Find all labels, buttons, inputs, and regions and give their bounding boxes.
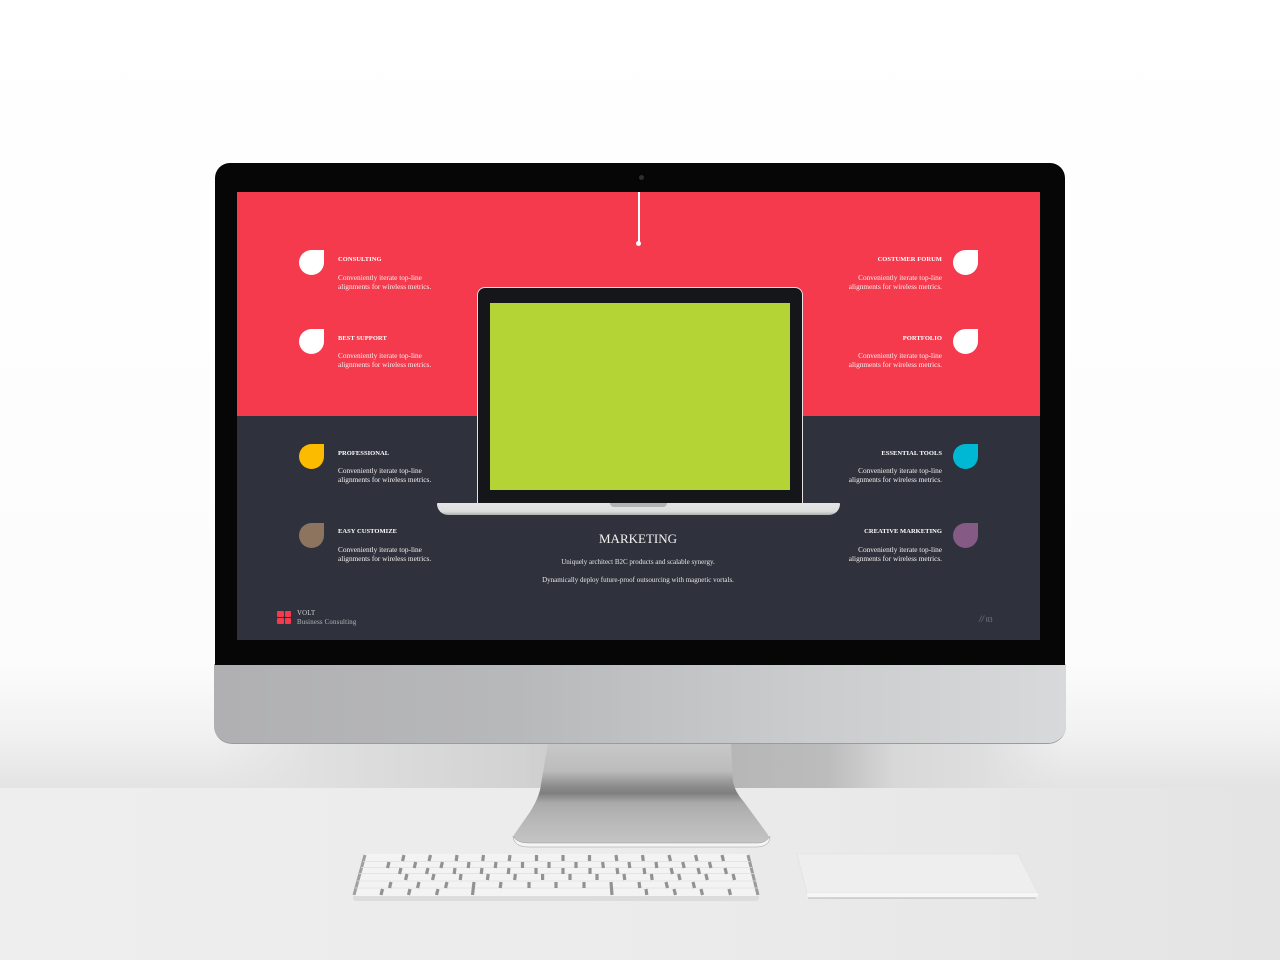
icon: white drop	[953, 250, 978, 275]
icon: white drop	[299, 250, 324, 275]
icon: yellow drop	[299, 444, 324, 469]
laptop	[437, 287, 840, 515]
text block	[849, 272, 942, 291]
logo text: VOLT	[297, 610, 315, 617]
slide screen	[237, 192, 1040, 640]
item: best support	[299, 329, 431, 369]
monitor chin	[214, 664, 1066, 744]
heading: PROFESSIONAL	[338, 450, 389, 457]
heading: CONSULTING	[338, 256, 382, 263]
text block: Conveniently iterate top-line	[338, 545, 422, 554]
text block: Conveniently iterate top-line	[338, 466, 422, 475]
icon: white drop	[953, 329, 978, 354]
trackpad	[807, 893, 1038, 898]
laptop lid	[477, 287, 803, 505]
page number: // 03	[979, 614, 993, 624]
item: essential tools	[849, 444, 978, 484]
icon: purple drop	[953, 523, 978, 548]
center text: Dynamically deploy future-proof outsourcing with magnetic vortals.	[542, 576, 734, 584]
text block: Conveniently iterate top-line	[858, 545, 942, 554]
text block: alignments for wireless metrics.	[338, 282, 431, 291]
text block: Conveniently iterate top-line	[858, 351, 942, 360]
heading: BEST SUPPORT	[338, 335, 387, 342]
text block: alignments for wireless metrics.	[338, 554, 431, 563]
monitor bezel	[215, 163, 1065, 665]
text block: alignments for wireless metrics.	[849, 554, 942, 563]
item: costumer forum	[849, 250, 978, 291]
text block	[338, 545, 431, 563]
text block: Conveniently iterate top-line	[858, 272, 942, 282]
keyboard	[352, 854, 760, 901]
center text	[542, 558, 734, 584]
item: professional	[299, 444, 431, 484]
heading: PORTFOLIO	[903, 335, 942, 342]
item: portfolio	[849, 329, 978, 369]
logo text	[297, 610, 357, 626]
center heading: MARKETING	[599, 531, 677, 546]
center text: Uniquely architect B2C products and scalable synergy.	[561, 558, 715, 566]
icon: white drop	[299, 329, 324, 354]
text block: Conveniently iterate top-line	[858, 466, 942, 475]
logo text: Business Consulting	[297, 619, 357, 626]
heading: EASY CUSTOMIZE	[338, 528, 397, 535]
heading: CREATIVE MARKETING	[864, 528, 942, 535]
text block	[849, 466, 942, 484]
item: creative marketing	[849, 523, 978, 563]
text block: alignments for wireless metrics.	[849, 475, 942, 484]
text block: alignments for wireless metrics.	[849, 282, 942, 291]
connector line with dot	[636, 192, 641, 246]
text block	[338, 351, 431, 369]
item: consulting	[299, 250, 431, 291]
laptop base	[437, 503, 840, 515]
item: easy customize	[299, 523, 431, 563]
laptop green screen	[490, 303, 790, 490]
laptop notch	[610, 503, 667, 507]
text block: Conveniently iterate top-line	[338, 351, 422, 360]
text block: alignments for wireless metrics.	[338, 475, 431, 484]
heading: ESSENTIAL TOOLS	[881, 450, 942, 457]
text block	[338, 466, 431, 484]
text block: alignments for wireless metrics.	[338, 360, 431, 369]
text block	[849, 545, 942, 563]
icon: cyan drop	[953, 444, 978, 469]
heading: COSTUMER FORUM	[878, 256, 942, 263]
text block: alignments for wireless metrics.	[849, 360, 942, 369]
monitor stand	[512, 744, 770, 848]
icon: brown drop	[299, 523, 324, 548]
text block	[338, 272, 431, 291]
logo icon	[277, 611, 291, 624]
text block	[849, 351, 942, 369]
red top panel	[237, 192, 1040, 416]
text block: Conveniently iterate top-line	[338, 272, 422, 282]
webcam	[639, 175, 644, 180]
